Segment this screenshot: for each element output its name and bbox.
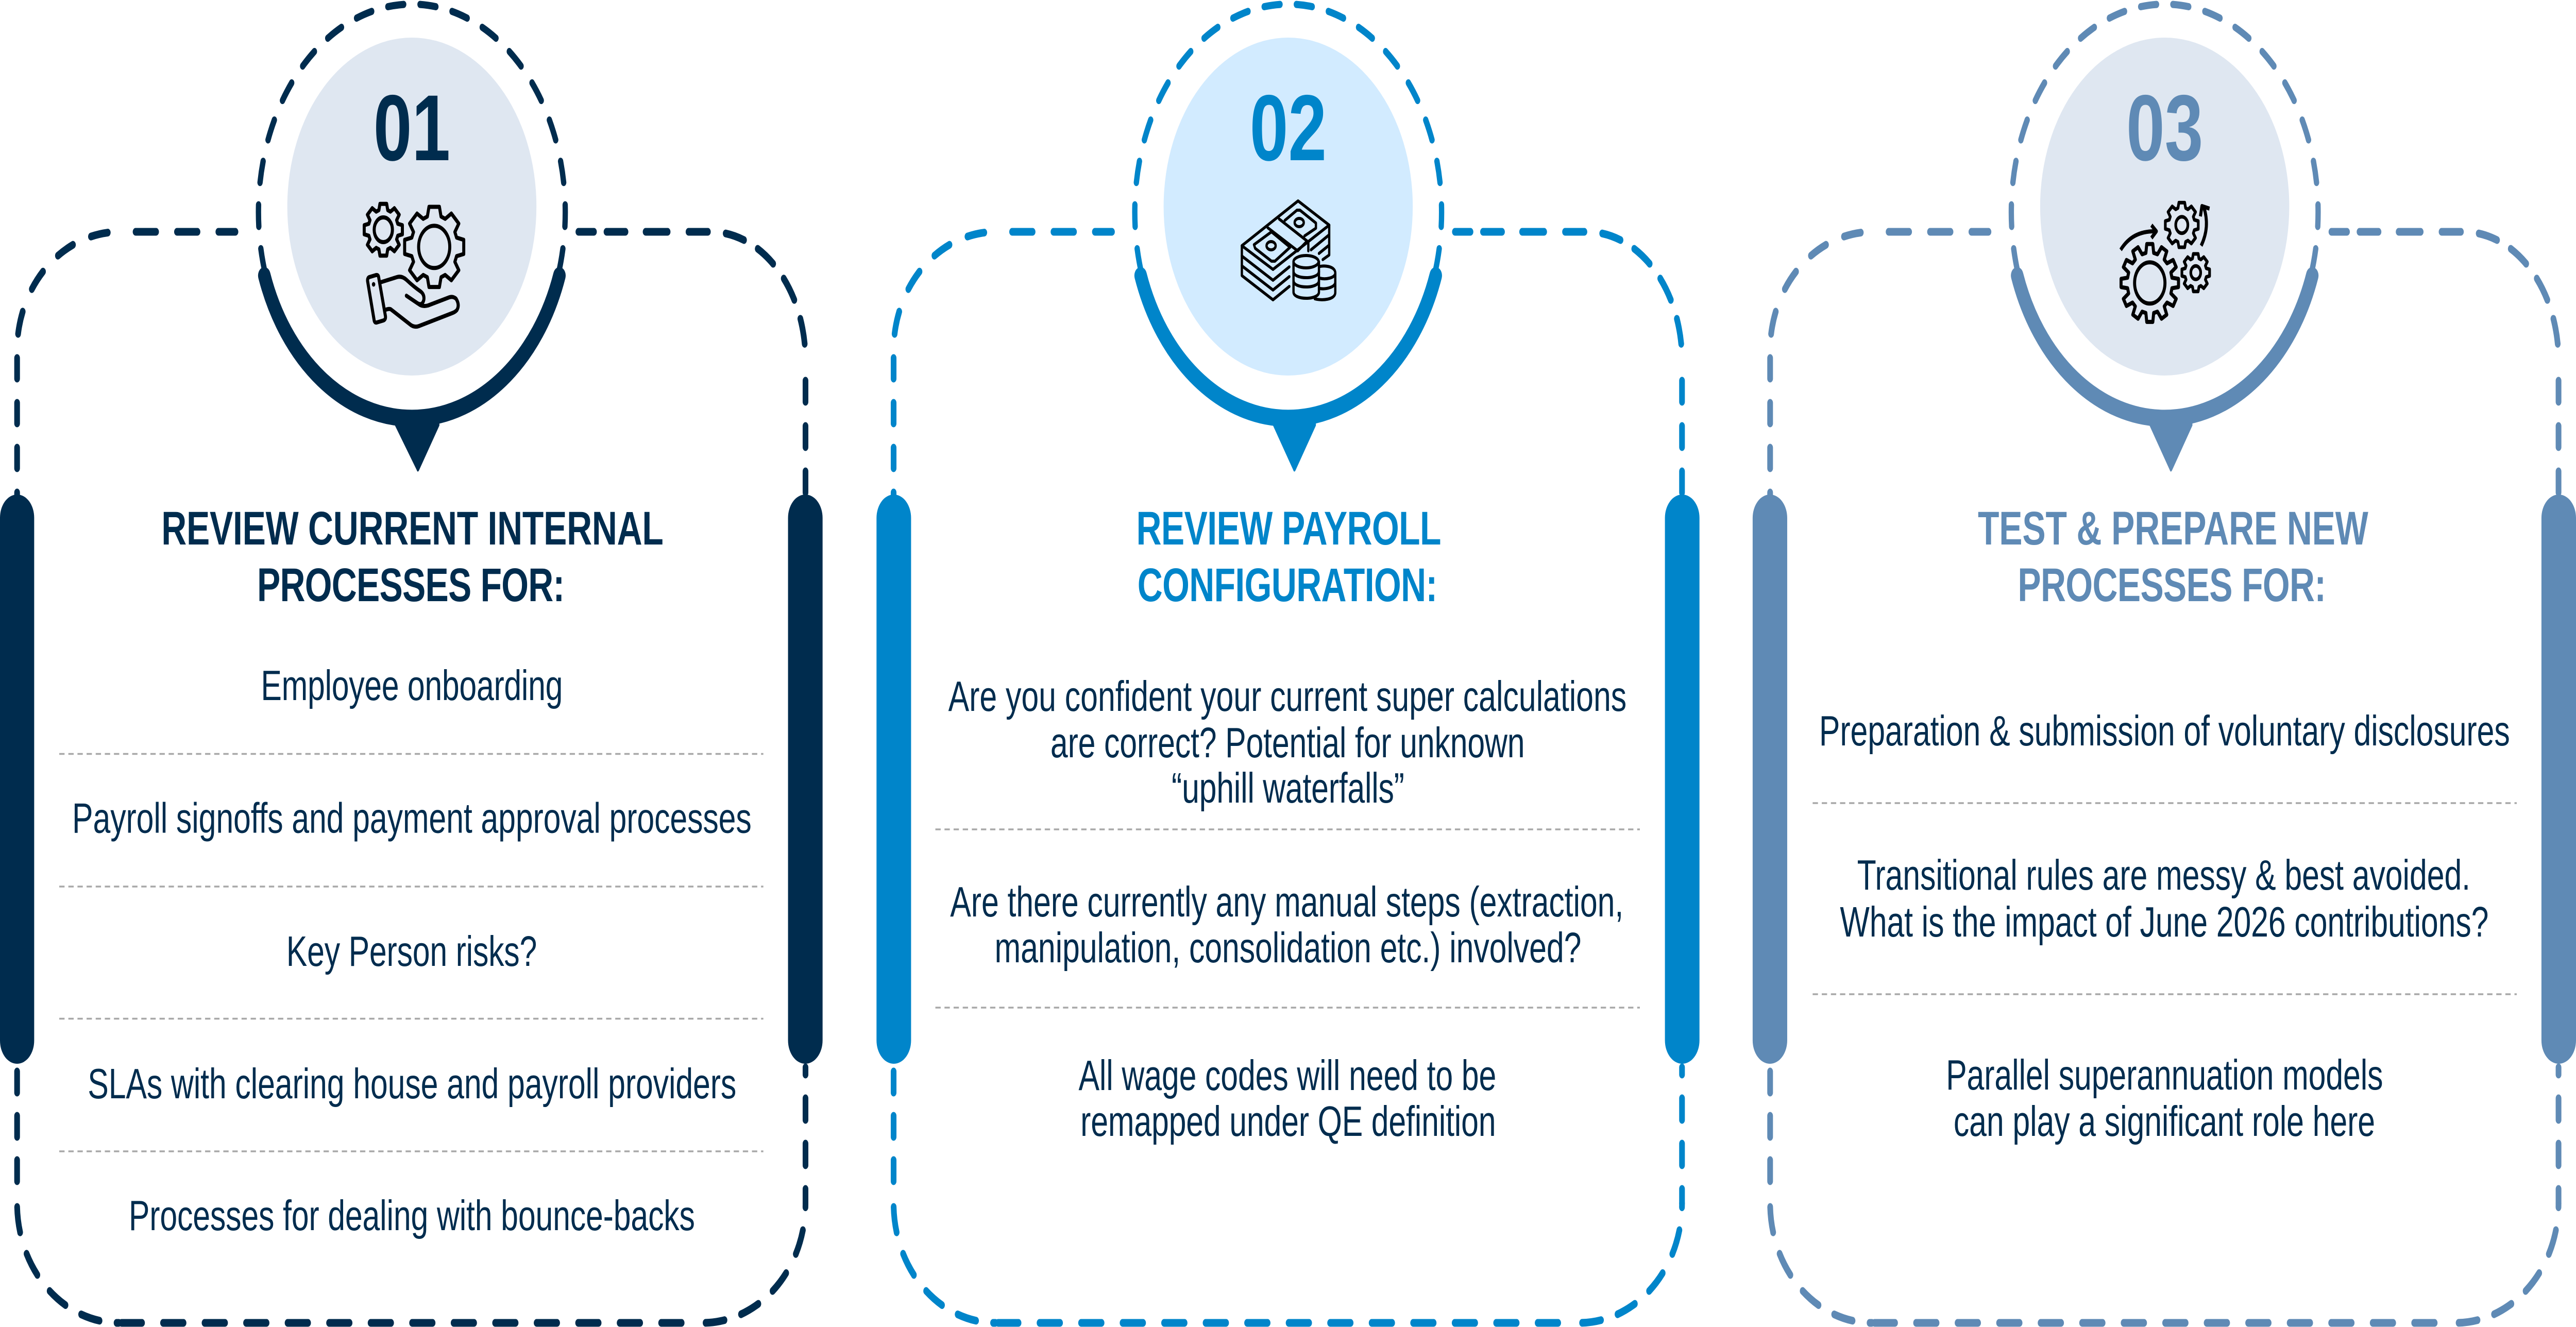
- list 01: SLAs with clearing house and payroll providers: [88, 1060, 736, 1108]
- list 01: Employee onboarding: [261, 662, 563, 709]
- heading 03: PROCESSES FOR:: [2018, 559, 2326, 611]
- number 03: 03: [2126, 75, 2203, 180]
- number 01: 01: [374, 75, 450, 180]
- list 01: Payroll signoffs and payment approval processes: [72, 795, 752, 842]
- heading 03: TEST & PREPARE NEW: [1978, 502, 2368, 555]
- list 02: “uphill waterfalls”: [1172, 764, 1404, 812]
- pointer arc 03: [2017, 276, 2312, 472]
- list 03: Preparation & submission of voluntary disclosures: [1819, 707, 2510, 755]
- dashed circle 03: [2011, 4, 2318, 274]
- circle disc 03: [2040, 38, 2289, 376]
- list 02: manipulation, consolidation etc.) involved?: [995, 924, 1581, 972]
- list 02: All wage codes will need to be: [1078, 1052, 1496, 1099]
- panel: step 01 review internal processes: [0, 4, 823, 1323]
- list 01: [59, 662, 764, 1239]
- number 02: 02: [1250, 75, 1327, 180]
- heading 03: [1978, 502, 2368, 611]
- list 03: [1812, 707, 2517, 1145]
- list 02: Are there currently any manual steps (extraction,: [950, 878, 1623, 926]
- list 02: Are you confident your current super calculations: [948, 673, 1626, 720]
- icon: money stack and coins: [1242, 201, 1335, 300]
- heading 01: REVIEW CURRENT INTERNAL: [161, 502, 664, 555]
- list 03: can play a significant role here: [1954, 1098, 2375, 1145]
- heading 02: CONFIGURATION:: [1138, 559, 1437, 611]
- list 02: [936, 673, 1640, 1145]
- circle disc 02: [1164, 38, 1413, 376]
- list 02: are correct? Potential for unknown: [1050, 719, 1525, 767]
- side bars 03: [1753, 495, 2576, 1064]
- circle disc 01: [287, 38, 536, 376]
- list 03: What is the impact of June 2026 contributions?: [1840, 898, 2488, 946]
- heading 02: [1137, 502, 1441, 611]
- heading 01: [161, 502, 664, 611]
- dashed rounded frame 03: [1770, 232, 2558, 1323]
- icon: three gears with arrows: [2121, 202, 2210, 322]
- pointer arc 01: [264, 276, 560, 472]
- list 03: Transitional rules are messy & best avoided.: [1857, 852, 2470, 899]
- dashed rounded frame 02: [893, 232, 1682, 1323]
- side bars 02: [876, 495, 1700, 1064]
- list 03: Parallel superannuation models: [1946, 1051, 2383, 1099]
- list 01: Processes for dealing with bounce-backs: [129, 1192, 695, 1239]
- panel: step 02 review payroll configuration: [876, 4, 1700, 1323]
- icon: gears on hand: [364, 204, 464, 327]
- list 01: Key Person risks?: [286, 928, 537, 975]
- panel: step 03 test and prepare new processes: [1753, 4, 2576, 1323]
- heading 02: REVIEW PAYROLL: [1137, 502, 1441, 555]
- heading 01: PROCESSES FOR:: [257, 559, 565, 611]
- side bars 01: [0, 495, 823, 1064]
- dashed rounded frame 01: [17, 232, 805, 1323]
- pointer arc 02: [1141, 276, 1436, 472]
- list 02: remapped under QE definition: [1080, 1098, 1496, 1145]
- dashed circle 01: [259, 4, 565, 274]
- dashed circle 02: [1135, 4, 1442, 274]
